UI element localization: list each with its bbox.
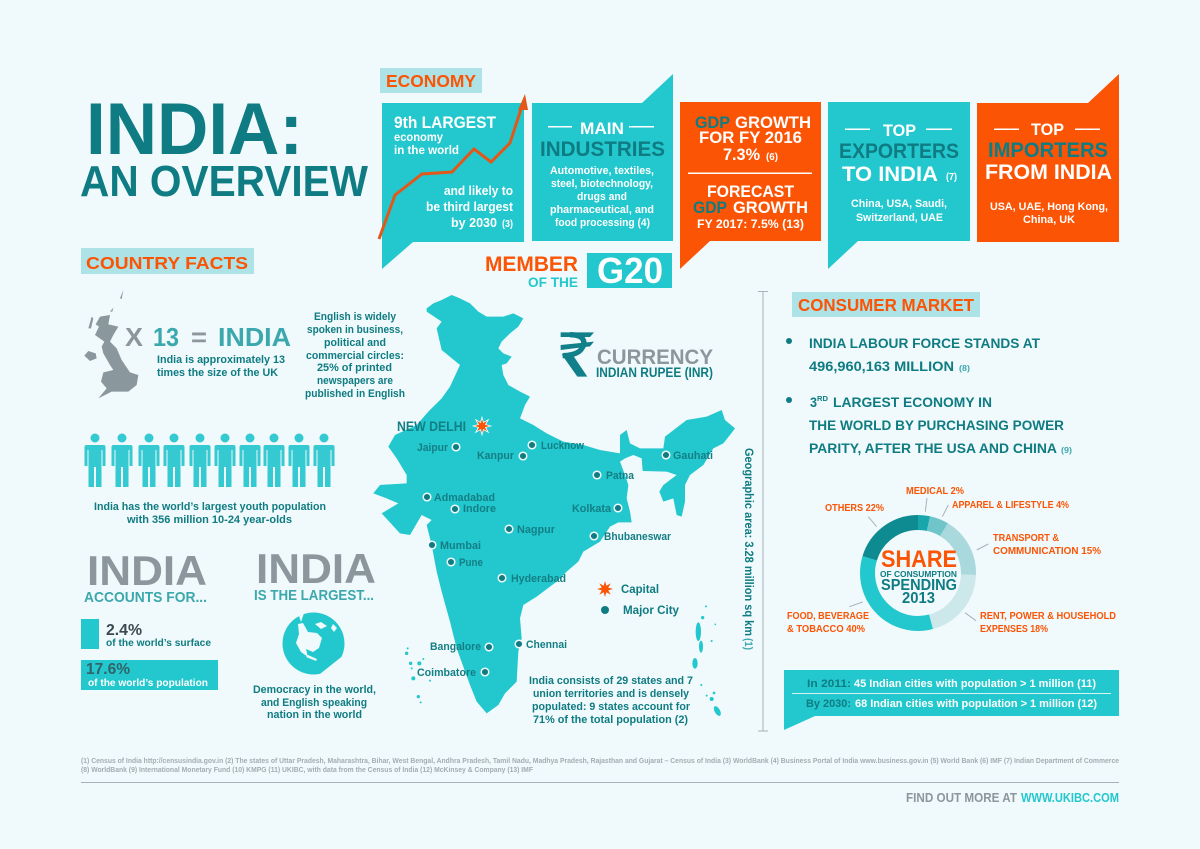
city markers and labels: Bangalore bbox=[430, 641, 481, 653]
city markers and labels: Pune bbox=[459, 557, 483, 569]
panel: top exporters: TO INDIA bbox=[842, 163, 938, 186]
text: youth population: with 356 million 10-24 year-olds bbox=[126, 514, 292, 526]
panel: cities banner: By 2030: bbox=[806, 698, 851, 710]
icon and text: currency: INDIAN RUPEE (INR) bbox=[596, 365, 713, 380]
bullet: third largest economy: 3 bbox=[810, 395, 817, 410]
panel: GDP growth: GROWTH bbox=[733, 199, 808, 217]
India is the largest: nation in the world bbox=[267, 709, 362, 721]
bullet: third largest economy: PARITY, AFTER THE USA AND CHINA bbox=[809, 441, 1057, 456]
footer link bbox=[906, 791, 1119, 805]
panel: 9th largest economy: 9th LARGEST bbox=[394, 114, 496, 132]
India accounts for: INDIA bbox=[87, 547, 207, 594]
panel: 9th largest economy: by 2030 bbox=[451, 216, 497, 230]
donut centre title: SHARE bbox=[881, 546, 957, 573]
donut chart: share of consumption spending bbox=[787, 486, 1116, 635]
map legend: Major City bbox=[623, 603, 679, 617]
icon: globe bbox=[282, 612, 346, 678]
city markers and labels: Coimbatore bbox=[417, 667, 476, 679]
bullet: labour force: 496,960,163 MILLION bbox=[809, 359, 954, 374]
panel: GDP growth: GDP bbox=[693, 199, 727, 217]
panel: main industries: drugs and bbox=[577, 191, 627, 203]
city markers and labels: Lucknow bbox=[541, 440, 584, 452]
donut labels: APPAREL & LIFESTYLE 4% bbox=[952, 500, 1069, 511]
panel: 9th largest economy: economy bbox=[394, 130, 443, 144]
footnotes: (8) WorldBank (9) International Monetary Fund (10) KMPG (11) UKIBC, with data from the Census of India (12) McKinsey & Company (13) IMF bbox=[81, 765, 533, 774]
donut centre title bbox=[880, 546, 957, 607]
text: states bbox=[529, 675, 693, 726]
panel: 9th largest economy: (3) bbox=[502, 219, 513, 230]
bullet: third largest economy bbox=[786, 395, 1072, 456]
city markers and labels: Gauhati bbox=[673, 450, 713, 462]
bullet: labour force: (8) bbox=[959, 363, 970, 373]
panel: top importers: FROM INDIA bbox=[985, 161, 1112, 184]
panel: 9th largest economy: in the world bbox=[394, 143, 459, 157]
title: INDIA: bbox=[86, 89, 303, 170]
stat: surface bbox=[81, 619, 211, 649]
text: English: commercial circles: bbox=[306, 350, 404, 362]
India accounts for bbox=[81, 547, 218, 690]
stat: population: of the world’s population bbox=[88, 678, 208, 689]
panel: cities banner: 45 Indian cities with population > 1 million (11) bbox=[854, 678, 1096, 690]
text: 13 times UK: times the size of the UK bbox=[157, 367, 278, 379]
donut labels: MEDICAL 2% bbox=[906, 486, 964, 497]
panel: 9th largest economy bbox=[379, 94, 528, 269]
text: English: newspapers are bbox=[317, 375, 393, 387]
donut labels: COMMUNICATION 15% bbox=[993, 546, 1101, 557]
scale line bbox=[758, 292, 768, 731]
text: youth population: India has the world’s largest youth population bbox=[94, 501, 326, 513]
donut labels: & TOBACCO 40% bbox=[787, 624, 865, 635]
panel: top importers bbox=[977, 74, 1119, 242]
panel: top exporters: Switzerland, UAE bbox=[856, 212, 943, 224]
text: 13 times UK bbox=[125, 322, 291, 379]
panel: GDP growth: 7.3% bbox=[723, 146, 760, 164]
India is the largest: and English speaking bbox=[261, 697, 367, 709]
donut labels: TRANSPORT & bbox=[993, 533, 1059, 544]
city markers and labels: Kanpur bbox=[477, 450, 515, 462]
title bbox=[80, 89, 368, 206]
text: 13 times UK: = bbox=[191, 322, 207, 352]
city markers and labels: Nagpur bbox=[517, 524, 556, 536]
panel: top importers: IMPORTERS bbox=[988, 139, 1108, 162]
panel: GDP growth: FOR FY 2016 bbox=[699, 129, 802, 147]
panel: GDP growth bbox=[680, 102, 821, 269]
map legend: Capital bbox=[621, 582, 659, 596]
footnotes: (1) Census of India http://censusindia.gov.in (2) The states of Uttar Pradesh, Maharashtra, Bihar, West Bengal, Andhra Pradesh, Tamil Nadu, Madhya Pradesh, Rajasthan and Gujarat – Census of India (3) WorldBank (4) Business Portal of India www.business.gov.in (5) World Bank (6) IMF (7) Indian Department of Commerce bbox=[81, 756, 1119, 765]
India accounts for: ACCOUNTS FOR... bbox=[84, 589, 207, 606]
bullet: third largest economy: THE WORLD BY PURCHASING POWER bbox=[809, 418, 1064, 433]
text: 13 times UK: INDIA bbox=[218, 322, 291, 352]
text: 13 times UK: 13 bbox=[153, 322, 179, 352]
city markers and labels: Chennai bbox=[526, 639, 567, 651]
icon and text: currency: CURRENCY bbox=[597, 346, 713, 369]
city markers and labels: Bhubaneswar bbox=[604, 531, 672, 543]
member of the G20: MEMBER bbox=[485, 252, 578, 276]
footnotes bbox=[81, 756, 1119, 774]
stat: surface: of the world’s surface bbox=[106, 638, 211, 649]
panel: GDP growth: FORECAST bbox=[707, 183, 794, 201]
heading: economy: ECONOMY bbox=[386, 71, 476, 91]
footer link: WWW.UKIBC.COM bbox=[1021, 791, 1119, 805]
panel: cities banner bbox=[784, 670, 1119, 730]
member of the G20 bbox=[485, 250, 672, 291]
panel: main industries: INDUSTRIES bbox=[540, 138, 665, 161]
city markers and labels: Kolkata bbox=[572, 503, 612, 515]
panel: top importers: USA, UAE, Hong Kong, bbox=[990, 201, 1108, 213]
label: capital New Delhi: NEW DELHI bbox=[397, 418, 466, 434]
donut centre title: OF CONSUMPTION bbox=[880, 570, 957, 579]
text: 13 times UK: X bbox=[125, 322, 144, 352]
text: states: union territories and is densely bbox=[533, 688, 690, 700]
bullet: third largest economy: RD bbox=[817, 396, 828, 403]
panel: top exporters: TOP bbox=[883, 121, 916, 140]
heading: country facts bbox=[81, 248, 254, 274]
panel: top exporters: (7) bbox=[946, 172, 957, 183]
text: English: spoken in business, bbox=[307, 324, 403, 336]
donut labels: FOOD, BEVERAGE bbox=[787, 611, 869, 622]
panel: main industries: pharmaceutical, and bbox=[550, 204, 654, 216]
text: geographic area vertical: Geographic area: 3.28 million sq km bbox=[742, 448, 756, 636]
text: English: published in English bbox=[305, 388, 405, 400]
city markers and labels: Jaipur bbox=[417, 442, 449, 454]
city markers and labels: Indore bbox=[463, 503, 496, 515]
title: AN OVERVIEW bbox=[80, 157, 368, 206]
stat: surface: 2.4% bbox=[106, 622, 142, 639]
India is the largest: INDIA bbox=[256, 545, 376, 592]
panel: 9th largest economy: be third largest bbox=[426, 200, 514, 214]
bullet: labour force: INDIA LABOUR FORCE STANDS AT bbox=[809, 336, 1041, 351]
panel: main industries bbox=[532, 74, 673, 241]
member of the G20: G20 bbox=[597, 250, 663, 291]
India is the largest: Democracy in the world, bbox=[253, 684, 376, 696]
city markers and labels: Admadabad bbox=[434, 492, 495, 504]
city markers and labels: Patna bbox=[606, 470, 635, 482]
India is the largest bbox=[253, 545, 376, 721]
text: English: political and bbox=[324, 337, 386, 349]
icon and text: currency bbox=[561, 332, 713, 380]
panel: main industries: Automotive, textiles, bbox=[550, 165, 654, 177]
panel: top importers: TOP bbox=[1031, 120, 1064, 139]
map of India bbox=[373, 295, 735, 717]
panel: GDP growth: FY 2017: 7.5% (13) bbox=[697, 217, 804, 231]
bullet: labour force bbox=[786, 336, 1041, 374]
donut labels: OTHERS 22% bbox=[825, 503, 884, 514]
donut centre title: SPENDING bbox=[881, 577, 957, 594]
footer link: FIND OUT MORE AT bbox=[906, 791, 1017, 805]
panel: cities banner: In 2011: bbox=[807, 678, 851, 690]
city markers and labels bbox=[417, 440, 713, 679]
city markers and labels: Mumbai bbox=[440, 540, 481, 552]
panel: main industries: food processing (4) bbox=[555, 217, 650, 229]
donut labels: EXPENSES 18% bbox=[980, 624, 1048, 635]
text: geographic area vertical: (1) bbox=[742, 638, 754, 650]
panel: main industries: steel, biotechnology, bbox=[551, 178, 653, 190]
panel: GDP growth: (6) bbox=[766, 152, 778, 163]
stat: population: 17.6% bbox=[86, 661, 130, 678]
icon: people row bbox=[84, 434, 334, 487]
bullet: third largest economy: (9) bbox=[1061, 445, 1072, 455]
panel: top exporters: China, USA, Saudi, bbox=[851, 198, 947, 210]
heading: consumer market: CONSUMER MARKET bbox=[798, 295, 974, 315]
panel: main industries: MAIN bbox=[580, 119, 624, 138]
line chart arrow bbox=[379, 94, 528, 239]
text: youth population bbox=[94, 501, 326, 526]
bullet: third largest economy: LARGEST ECONOMY IN bbox=[833, 395, 992, 410]
member of the G20: OF THE bbox=[528, 274, 578, 290]
text: English bbox=[305, 311, 405, 400]
panel: top exporters bbox=[828, 102, 970, 269]
text: English: 25% of printed bbox=[317, 362, 392, 374]
India is the largest: IS THE LARGEST... bbox=[254, 587, 374, 604]
city markers and labels: Hyderabad bbox=[511, 573, 566, 585]
panel: GDP growth: GROWTH bbox=[735, 114, 811, 132]
donut labels bbox=[787, 486, 1116, 635]
panel: cities banner: 68 Indian cities with population > 1 million (12) bbox=[855, 698, 1097, 710]
stat: population bbox=[81, 660, 218, 690]
panel: top exporters: EXPORTERS bbox=[839, 140, 959, 163]
heading: country facts: COUNTRY FACTS bbox=[86, 253, 248, 273]
panel: 9th largest economy: and likely to bbox=[444, 184, 513, 198]
text: states: populated: 9 states account for bbox=[532, 701, 691, 713]
text: states: 71% of the total population (2) bbox=[533, 714, 688, 726]
map legend bbox=[597, 581, 679, 617]
text: English: English is widely bbox=[314, 311, 397, 323]
text: states: India consists of 29 states and 7 bbox=[529, 675, 693, 687]
text: 13 times UK: India is approximately 13 bbox=[157, 354, 285, 366]
icon: UK map bbox=[84, 290, 138, 398]
donut centre title: 2013 bbox=[902, 590, 935, 607]
panel: top importers: China, UK bbox=[1023, 214, 1075, 226]
donut labels: RENT, POWER & HOUSEHOLD bbox=[980, 611, 1116, 622]
panel: GDP growth: GDP bbox=[695, 114, 730, 132]
